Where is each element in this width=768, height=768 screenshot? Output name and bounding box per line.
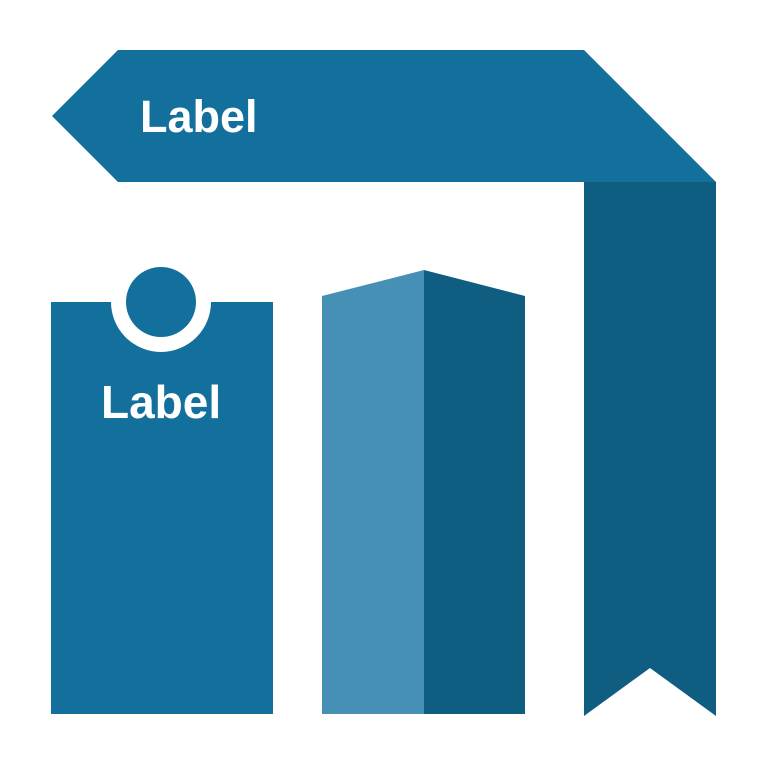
banner label text: Label [140,91,258,142]
pillar: middle 3D bar [322,270,525,714]
box label text: Label [101,376,221,428]
ribbon: right hanging tail [584,182,716,716]
panel: left box with circle [51,267,273,714]
banner: top arrow label [52,50,716,182]
icon: circle [126,267,196,337]
